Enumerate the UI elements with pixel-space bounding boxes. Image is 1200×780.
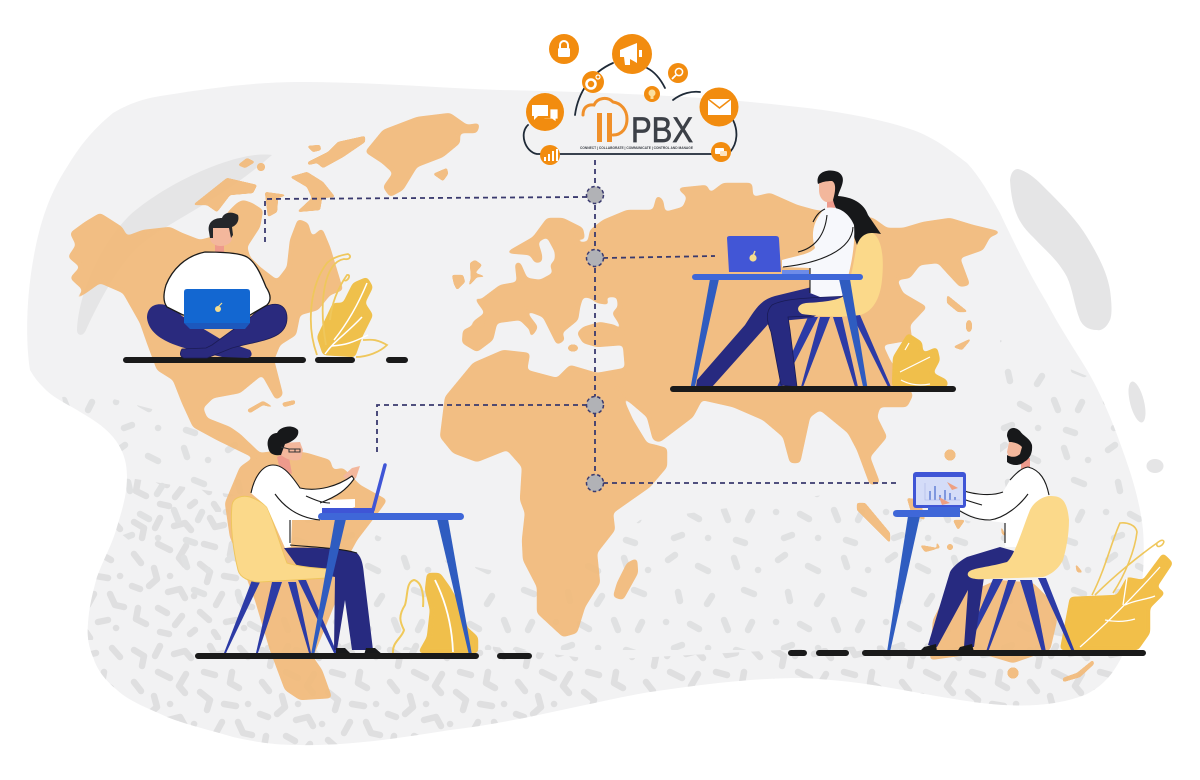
laptop <box>322 465 385 514</box>
connector lines <box>265 160 897 483</box>
Caribbean <box>247 401 275 413</box>
connector nodes <box>586 186 604 492</box>
neck and face <box>1021 458 1030 471</box>
ground line <box>126 357 405 363</box>
icon: envelope <box>700 88 738 126</box>
table <box>887 507 960 652</box>
chair legs <box>777 315 891 387</box>
hair <box>209 213 238 238</box>
icon: growth chart <box>540 145 560 165</box>
ground line <box>673 386 953 392</box>
islands <box>193 136 1094 682</box>
person: bearded man at desk with chart laptop <box>791 428 1173 653</box>
stipple texture <box>62 340 1144 745</box>
neck and face <box>827 200 835 210</box>
long hair <box>818 170 881 245</box>
PBX wordmark: PBX <box>631 111 693 150</box>
British Isles <box>468 260 487 287</box>
torso <box>164 252 270 315</box>
hair and beard <box>1007 428 1032 465</box>
trousers <box>928 547 1014 647</box>
cloud outline <box>524 63 736 154</box>
icon: light bulb <box>644 86 660 102</box>
plant <box>1060 523 1173 650</box>
North America <box>68 200 343 458</box>
hand <box>343 466 360 482</box>
chair legs <box>224 580 337 653</box>
neck and face <box>215 243 224 253</box>
world map <box>68 113 1094 700</box>
Arctic islands <box>433 168 448 181</box>
chair <box>968 496 1069 579</box>
plant <box>393 573 478 653</box>
Australia <box>930 580 1057 663</box>
laptop <box>184 289 250 329</box>
Eurasia and Africa <box>440 183 1002 637</box>
person: woman at desk with laptop <box>673 170 953 391</box>
glasses <box>281 447 300 452</box>
person: man sitting cross-legged with laptop <box>126 213 405 360</box>
person: man with glasses at desk <box>198 426 529 656</box>
legs <box>147 304 252 358</box>
ground line <box>791 650 1143 656</box>
trousers <box>284 548 373 650</box>
torso and arm <box>251 465 355 548</box>
shoes <box>336 648 383 655</box>
table <box>311 513 472 655</box>
icon: megaphone <box>612 34 652 74</box>
background blob <box>27 82 1144 745</box>
Japan and Philippines <box>947 295 968 312</box>
ground line <box>198 653 529 659</box>
torso and arm <box>950 467 1049 547</box>
laptop <box>727 236 809 275</box>
tagline: CONNECT | COLLABORATE | COMMUNICATE | CONTROL AND MANAGE <box>580 146 694 150</box>
logo mark <box>583 98 627 135</box>
icon: small chat <box>711 142 731 162</box>
icon: lock <box>549 34 579 64</box>
IPPBX cloud logo <box>524 34 738 165</box>
Madagascar <box>613 558 638 600</box>
continents <box>68 113 1057 700</box>
torso and arm <box>782 207 854 297</box>
chair <box>798 231 883 317</box>
icon: search <box>668 63 688 83</box>
hair <box>268 426 298 455</box>
New Zealand <box>1063 660 1094 682</box>
icon: chat bubbles <box>526 93 564 131</box>
grey accent shapes <box>77 154 1164 473</box>
Greenland <box>365 113 480 197</box>
shoes <box>919 644 974 652</box>
trousers <box>696 287 845 387</box>
laptop <box>913 472 966 508</box>
Indonesia <box>857 503 890 543</box>
chair <box>231 496 327 582</box>
plant <box>311 254 387 357</box>
icon: gears <box>582 71 604 93</box>
table <box>690 274 868 391</box>
South America <box>225 450 387 700</box>
plant <box>892 333 948 387</box>
neck and face <box>277 452 292 474</box>
chair legs <box>962 578 1075 652</box>
